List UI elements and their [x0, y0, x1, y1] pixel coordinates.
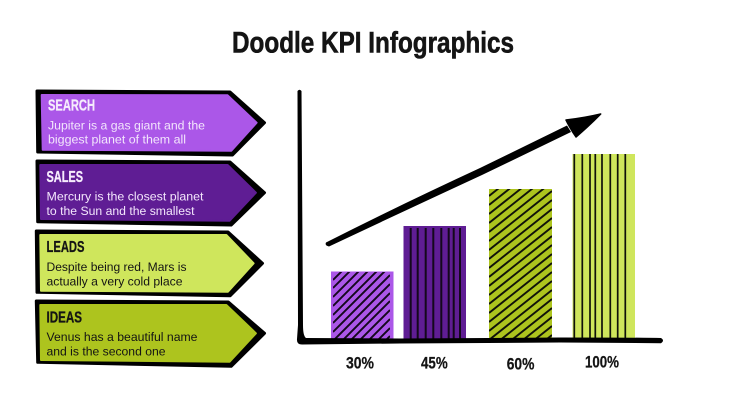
- heading: sales: SALES: [46, 169, 83, 186]
- heading: leads: LEADS: [46, 239, 84, 256]
- bar: 30%: [331, 272, 394, 338]
- heading: ideas: IDEAS: [46, 310, 82, 326]
- value labels: 100%: [585, 353, 619, 372]
- text: sales description: to the Sun and the smallest: [46, 204, 195, 218]
- trend arrow: [326, 114, 601, 246]
- bar: 100%: [572, 154, 635, 340]
- text: search description: biggest planet of them all: [48, 132, 186, 146]
- text: sales description: Mercury is the closest planet: [46, 190, 204, 204]
- text: leads description: [46, 260, 186, 288]
- text: leads description: Despite being red, Mars is: [46, 260, 186, 274]
- text: sales description: [46, 190, 204, 218]
- value labels: 45%: [421, 353, 448, 372]
- panel: ideas: [36, 301, 264, 366]
- text: search description: Jupiter is a gas giant and the: [48, 118, 205, 132]
- text: ideas description: and is the second one: [46, 344, 166, 358]
- text: leads description: actually a very cold place: [46, 274, 183, 288]
- text: search description: [48, 118, 205, 146]
- panel: search: [37, 91, 264, 155]
- bar chart: [297, 90, 663, 394]
- value labels: [346, 353, 619, 374]
- value labels: 30%: [346, 353, 374, 372]
- panel: leads: [36, 231, 262, 296]
- title: Doodle KPI Infographics: [232, 27, 514, 60]
- text: ideas description: [46, 330, 198, 358]
- panel: sales: [37, 161, 264, 225]
- value labels: 60%: [507, 354, 534, 374]
- bar: 45%: [404, 226, 466, 340]
- bar: 60%: [489, 189, 552, 338]
- text: ideas description: Venus has a beautiful name: [46, 330, 198, 344]
- heading: search: SEARCH: [48, 98, 95, 115]
- axes: [297, 90, 663, 344]
